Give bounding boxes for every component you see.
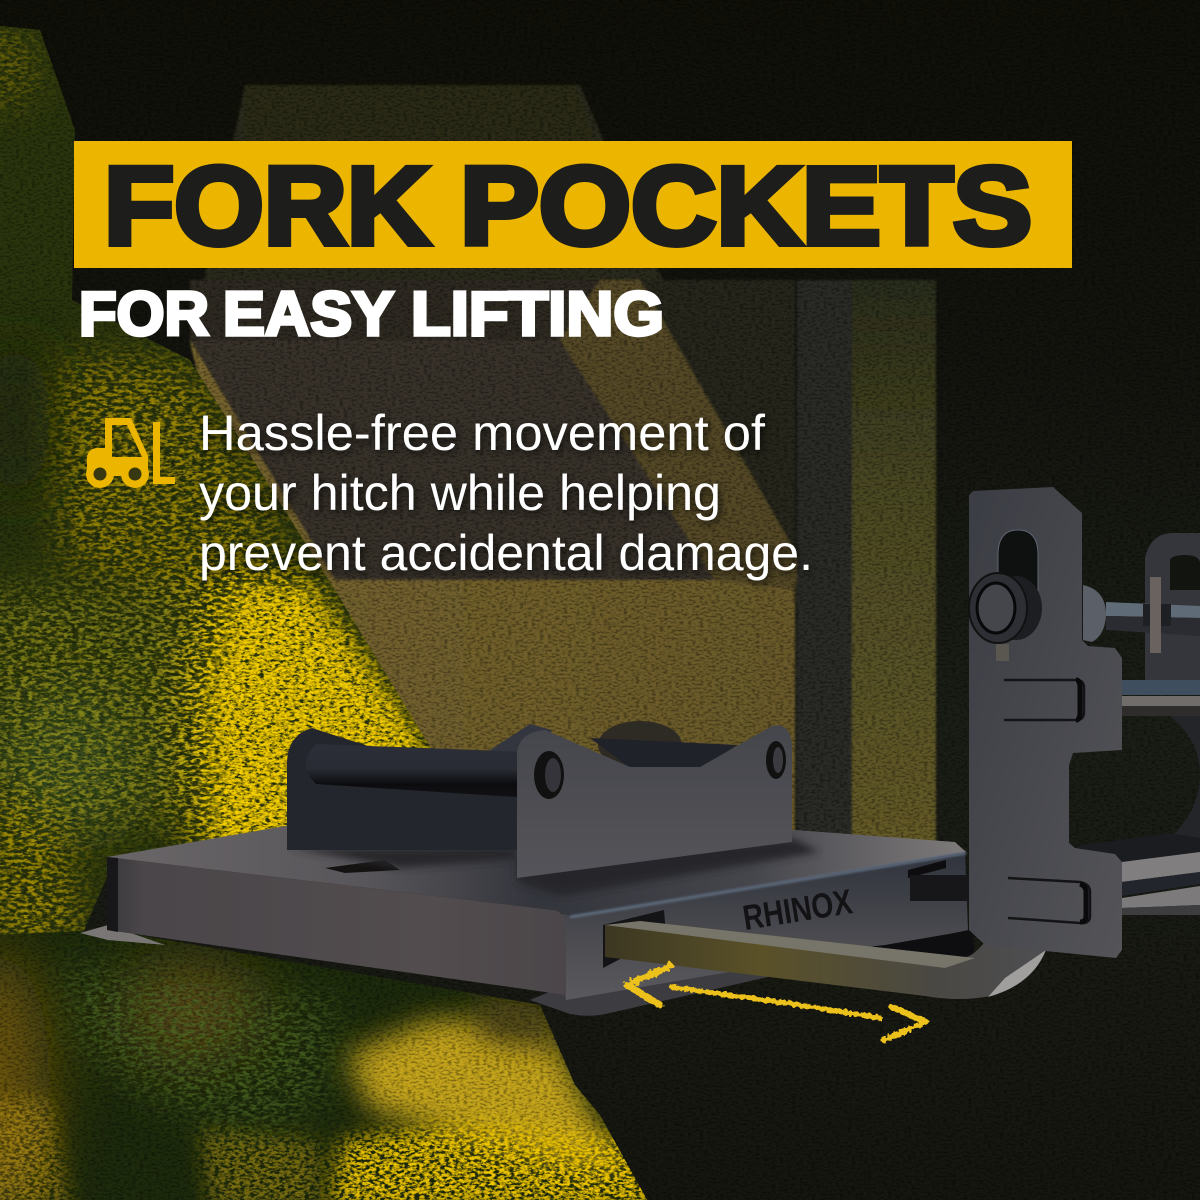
front side plate: [517, 725, 792, 878]
upright bracket: [969, 487, 1122, 958]
bolts: [534, 751, 564, 799]
background: upper and left paint: [0, 26, 431, 934]
base plate top: [107, 826, 966, 916]
subtitle: EASY: [223, 280, 394, 349]
hole in plate: [325, 860, 400, 873]
arrow: chalk double-headed: [627, 966, 926, 1040]
description text: Hassle-free movement of: [199, 405, 765, 461]
product: hitch base with fork pockets: [80, 487, 1200, 1016]
keyhole slot: [998, 530, 1038, 590]
brand lettering: RHINOX: [740, 882, 855, 938]
title text: [104, 145, 1032, 268]
description text: prevent accidental damage.: [199, 525, 813, 581]
background: lower paint: [0, 920, 670, 1200]
base plate side face: [555, 850, 968, 1000]
subtitle: FOR: [79, 280, 209, 349]
rear plate: [287, 728, 520, 850]
subtitle: LIFTING: [411, 280, 664, 349]
icon: forklift: [86, 418, 175, 488]
far pin segment: [590, 738, 738, 768]
rear hitch assembly: [1075, 533, 1200, 915]
description text: your hitch while helping: [199, 465, 721, 521]
description text: [199, 405, 813, 581]
fork bar: [605, 921, 1046, 999]
fork pocket openings: [603, 910, 666, 968]
blue highlight along top edge: [570, 853, 966, 917]
title text: FORK: [104, 145, 430, 268]
bracket clips: [1004, 680, 1090, 923]
title banner: [74, 141, 1072, 268]
base plate flanges: [80, 925, 165, 945]
dark gap under side: [745, 930, 975, 965]
title text: POCKETS: [460, 145, 1032, 268]
subtitle: [79, 280, 664, 349]
pin cylinder: [306, 744, 530, 798]
locking knob: [969, 573, 1042, 661]
shadow of side plates on base: [287, 838, 820, 896]
background: letter stripes: [190, 85, 936, 850]
base plate front: [107, 857, 566, 995]
